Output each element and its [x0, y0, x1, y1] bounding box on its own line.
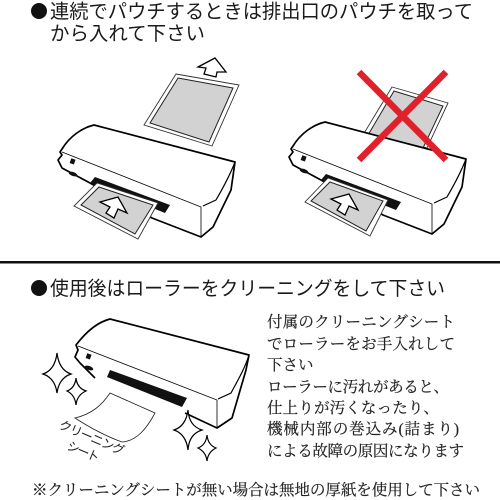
heading: second line: から入れて下さい: [50, 23, 205, 45]
printer: [289, 122, 466, 234]
sheet label: シート: [65, 439, 102, 465]
arrow: pouch entry: [100, 197, 127, 218]
text: cleaning instructions: 機械内部の巻込み(詰まり): [267, 420, 459, 438]
divider: [0, 261, 500, 264]
input pouch: [305, 178, 388, 236]
blocked pouch: [363, 87, 448, 148]
illustration: cleaning: [43, 319, 249, 465]
input pouch: [74, 183, 158, 239]
text: cleaning instructions: ローラーに汚れがあると、: [267, 378, 449, 396]
heading: continuous pouching: 連続でパウチするときは排出口のパウチを取って: [50, 1, 473, 23]
heading: clean rollers: 使用後はローラーをクリーニングをして下さい: [50, 278, 445, 300]
illustration: correct pouching: [58, 58, 239, 239]
illustration: incorrect pouching: [289, 72, 466, 236]
sheet label: クリーニング: [57, 418, 127, 458]
text: cleaning instructions: [267, 313, 464, 460]
text: cleaning instructions: 下さい: [267, 356, 314, 374]
text: cleaning instructions: 付属のクリーニングシート: [267, 313, 455, 331]
roller slot: [107, 370, 187, 407]
cleaning sheet: [75, 393, 155, 442]
footnote: ※クリーニングシートが無い場合は無地の厚紙を使用して下さい: [32, 480, 480, 499]
arrow: pouch exit: [198, 58, 226, 77]
red cross: [359, 72, 446, 160]
printer: [58, 125, 235, 237]
printer body: [75, 319, 249, 428]
arrow: pouch entry: [331, 194, 358, 215]
sparkles: [43, 353, 216, 461]
text: cleaning instructions: 仕上りが汚くなったり、: [267, 399, 439, 417]
text: cleaning instructions: による故障の原因になります: [267, 442, 464, 460]
text: cleaning instructions: でローラーをお手入れして: [267, 335, 455, 353]
finished pouch: [144, 74, 239, 146]
